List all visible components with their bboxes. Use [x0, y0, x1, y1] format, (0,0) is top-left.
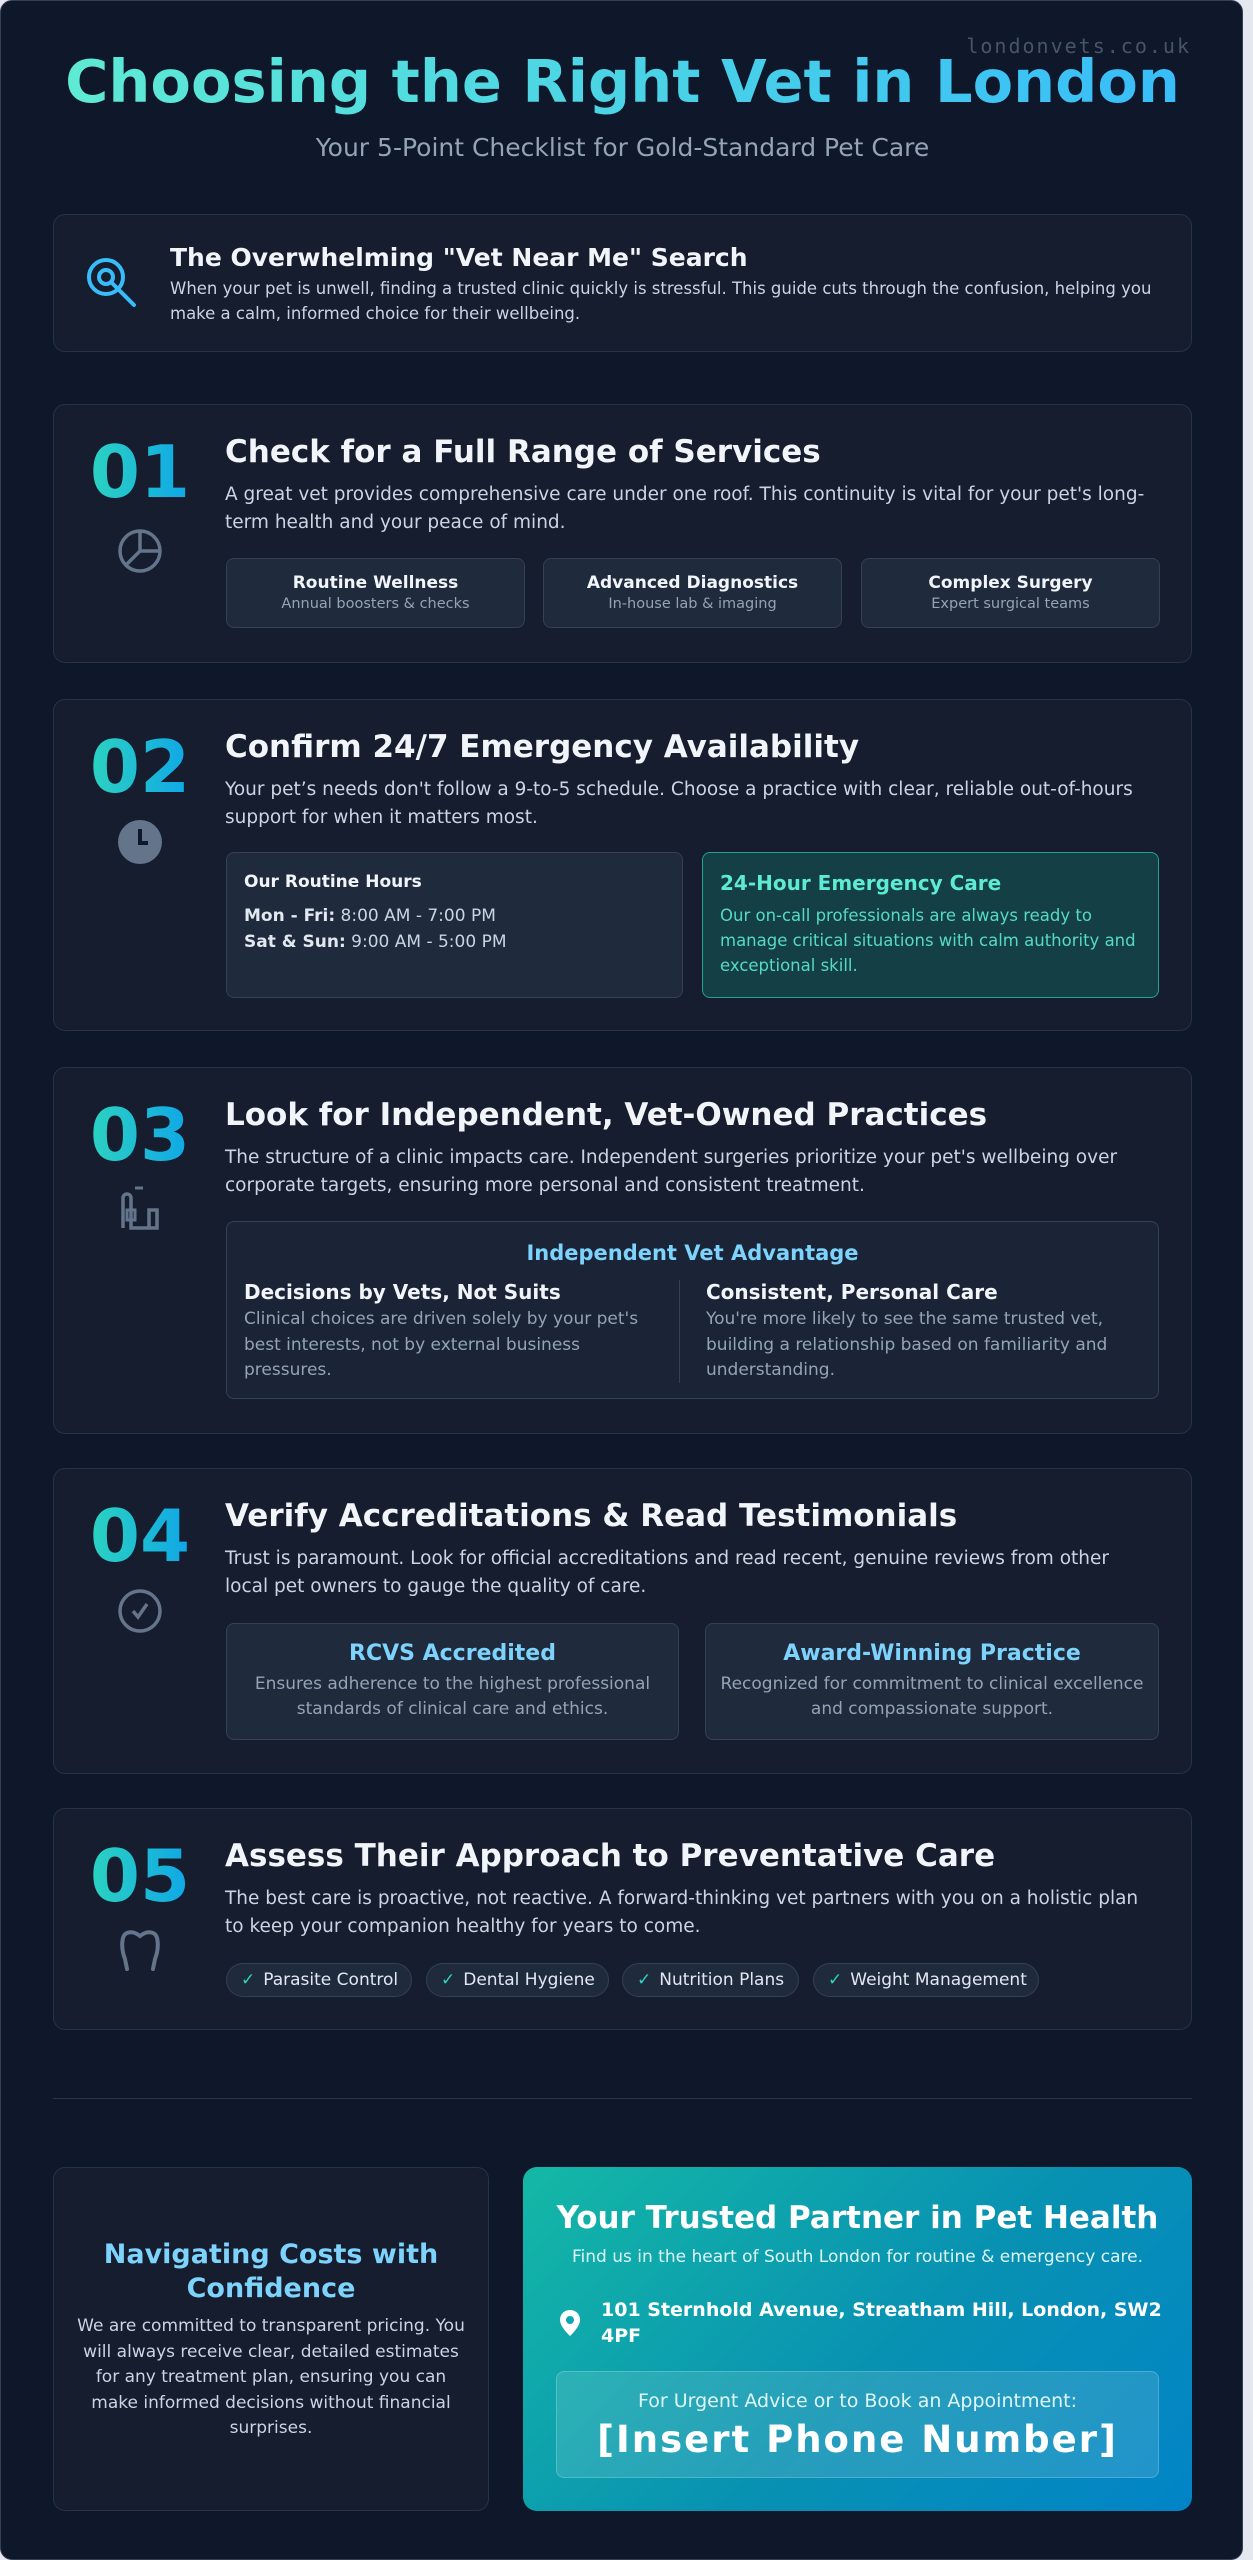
subtitle: Your 5-Point Checklist for Gold-Standard Pet Care [316, 133, 929, 162]
intro text [170, 243, 1151, 322]
advantage: consistent: Consistent, Personal Care [706, 1280, 998, 1304]
advantage box [226, 1221, 1159, 1399]
heading 03: Look for Independent, Vet-Owned Practices [225, 1097, 987, 1133]
award box [705, 1623, 1159, 1740]
emergency care box: Our on-call professionals are always ready to manage critical situations with calm authority and exceptional skill. [720, 906, 1136, 975]
address: 101 Sternhold Avenue, Streatham Hill, London, SW2 4PF [601, 2299, 1162, 2347]
desc 02: Your pet’s needs don't follow a 9-to-5 schedule. Choose a practice with clear, reliable out-of-hours support for when it matters most. [225, 779, 1133, 828]
routine hours box: Mon - Fri: 8:00 AM - 7:00 PM [244, 906, 496, 926]
pill: parasite [226, 1963, 412, 1997]
phone box: For Urgent Advice or to Book an Appointment: [638, 2390, 1077, 2412]
icon: map pin [560, 2310, 580, 2336]
number 01: 01 [90, 430, 190, 514]
routine hours box [226, 852, 683, 998]
panel: 02 emergency [53, 699, 1192, 1031]
number 03: 03 [90, 1093, 190, 1177]
pill: weight: ✓ Weight Management [828, 1970, 1027, 1990]
phone box [556, 2371, 1159, 2478]
contact subtitle: Find us in the heart of South London for routine & emergency care. [572, 2247, 1143, 2267]
icon: pie [118, 529, 162, 573]
service: surgery [861, 558, 1160, 628]
domain label: londonvets.co.uk [966, 34, 1191, 58]
service: diagnostics [543, 558, 842, 628]
RCVS box: Ensures adherence to the highest professional standards of clinical care and ethics. [255, 1674, 650, 1719]
heading 04: Verify Accreditations & Read Testimonials [225, 1498, 957, 1534]
contact heading: Your Trusted Partner in Pet Health [557, 2200, 1158, 2236]
phone box: [Insert Phone Number] [597, 2418, 1118, 2461]
emergency care box: 24-Hour Emergency Care [720, 871, 1001, 895]
costs text: We are committed to transparent pricing. You will always receive clear, detailed estimates for any treatment plan, ensuring you can make informed decisions without financial surprises. [77, 2316, 465, 2438]
service: routine [226, 558, 525, 628]
number 04: 04 [90, 1494, 190, 1578]
icon: check circle [118, 1589, 162, 1633]
panel: 01 services [53, 404, 1192, 663]
heading 02: Confirm 24/7 Emergency Availability [225, 729, 859, 765]
number 05: 05 [90, 1834, 190, 1918]
title: Choosing the Right Vet in London [65, 47, 1180, 116]
desc 03: The structure of a clinic impacts care. Independent surgeries prioritize your pet's wellbeing over corporate targets, ensuring more personal and consistent treatment. [225, 1147, 1117, 1196]
panel: 04 accreditations [53, 1468, 1192, 1774]
emergency care box [702, 852, 1159, 998]
desc 04: Trust is paramount. Look for official accreditations and read recent, genuine reviews from other local pet owners to gauge the quality of care. [225, 1548, 1109, 1597]
pill: nutrition [622, 1963, 799, 1997]
service: routine: Annual boosters & checks [281, 596, 470, 612]
panel: costs [53, 2167, 489, 2511]
icon: tooth [120, 1930, 160, 1971]
pill: dental [426, 1963, 609, 1997]
advantage: decisions: Clinical choices are driven solely by your pet's best interests, not by external business pressures. [244, 1309, 638, 1380]
routine hours box: Our Routine Hours [244, 872, 422, 892]
pill: parasite: ✓ Parasite Control [241, 1970, 398, 1990]
pill: nutrition: ✓ Nutrition Plans [637, 1970, 784, 1990]
icon: search [87, 258, 136, 308]
service: surgery: Expert surgical teams [931, 596, 1090, 612]
panel: contact [523, 2167, 1192, 2511]
award box: Award-Winning Practice [783, 1641, 1081, 1666]
intro text: When your pet is unwell, finding a trusted clinic quickly is stressful. This guide cuts through the confusion, helping you make a calm, informed choice for their wellbeing. [170, 279, 1151, 322]
RCVS box [226, 1623, 679, 1740]
desc 01: A great vet provides comprehensive care under one roof. This continuity is vital for your pet's long-term health and your peace of mind. [225, 484, 1144, 533]
costs heading: Navigating Costs with Confidence [104, 2239, 438, 2304]
service: routine: Routine Wellness [293, 573, 458, 593]
desc 05: The best care is proactive, not reactive. A forward-thinking vet partners with you on a holistic plan to keep your companion healthy for years to come. [225, 1888, 1138, 1937]
heading 01: Check for a Full Range of Services [225, 434, 821, 470]
heading 05: Assess Their Approach to Preventative Care [225, 1838, 995, 1874]
intro text: The Overwhelming "Vet Near Me" Search [170, 243, 748, 272]
pill: weight [813, 1963, 1039, 1997]
panel: 03 independent [53, 1067, 1192, 1434]
award box: Recognized for commitment to clinical excellence and compassionate support. [721, 1674, 1143, 1719]
advantage: decisions: Decisions by Vets, Not Suits [244, 1280, 561, 1304]
advantage heading: Independent Vet Advantage [526, 1241, 859, 1265]
icon: building [121, 1186, 159, 1230]
advantage: consistent: You're more likely to see the same trusted vet, building a relationship based on familiarity and understanding. [706, 1309, 1107, 1380]
panel: intro [53, 214, 1192, 352]
icon: clock [118, 820, 162, 864]
routine hours box: Sat & Sun: 9:00 AM - 5:00 PM [244, 932, 506, 952]
panel: 05 preventative [53, 1808, 1192, 2030]
service: surgery: Complex Surgery [928, 573, 1093, 593]
pill: dental: ✓ Dental Hygiene [441, 1970, 595, 1990]
service: diagnostics: In-house lab & imaging [608, 596, 777, 612]
service: diagnostics: Advanced Diagnostics [587, 573, 798, 593]
RCVS box: RCVS Accredited [349, 1641, 556, 1666]
number 02: 02 [90, 725, 190, 809]
